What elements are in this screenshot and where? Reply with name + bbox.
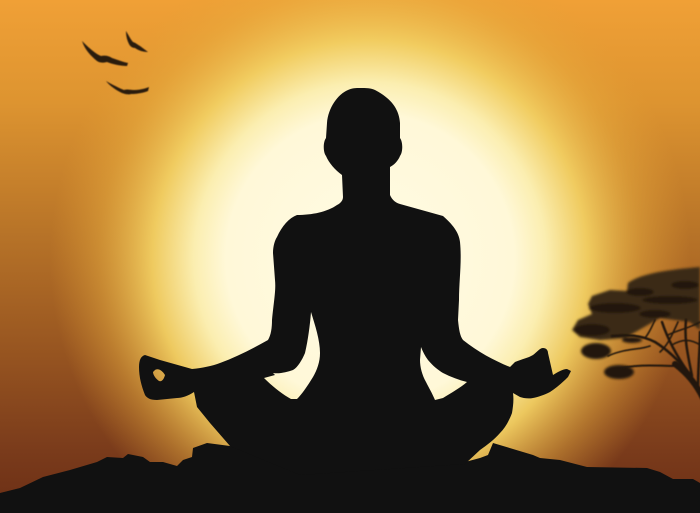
- bird: large left: [82, 41, 128, 66]
- birds: [82, 31, 149, 94]
- meditating figure silhouette: [139, 88, 571, 475]
- tree at right edge: [572, 267, 700, 398]
- ground silhouette: [0, 443, 700, 513]
- bird: lower: [106, 81, 149, 94]
- bird: upper right: [126, 31, 148, 52]
- tree trunk and branches: [608, 320, 700, 398]
- tree canopy: [572, 267, 700, 379]
